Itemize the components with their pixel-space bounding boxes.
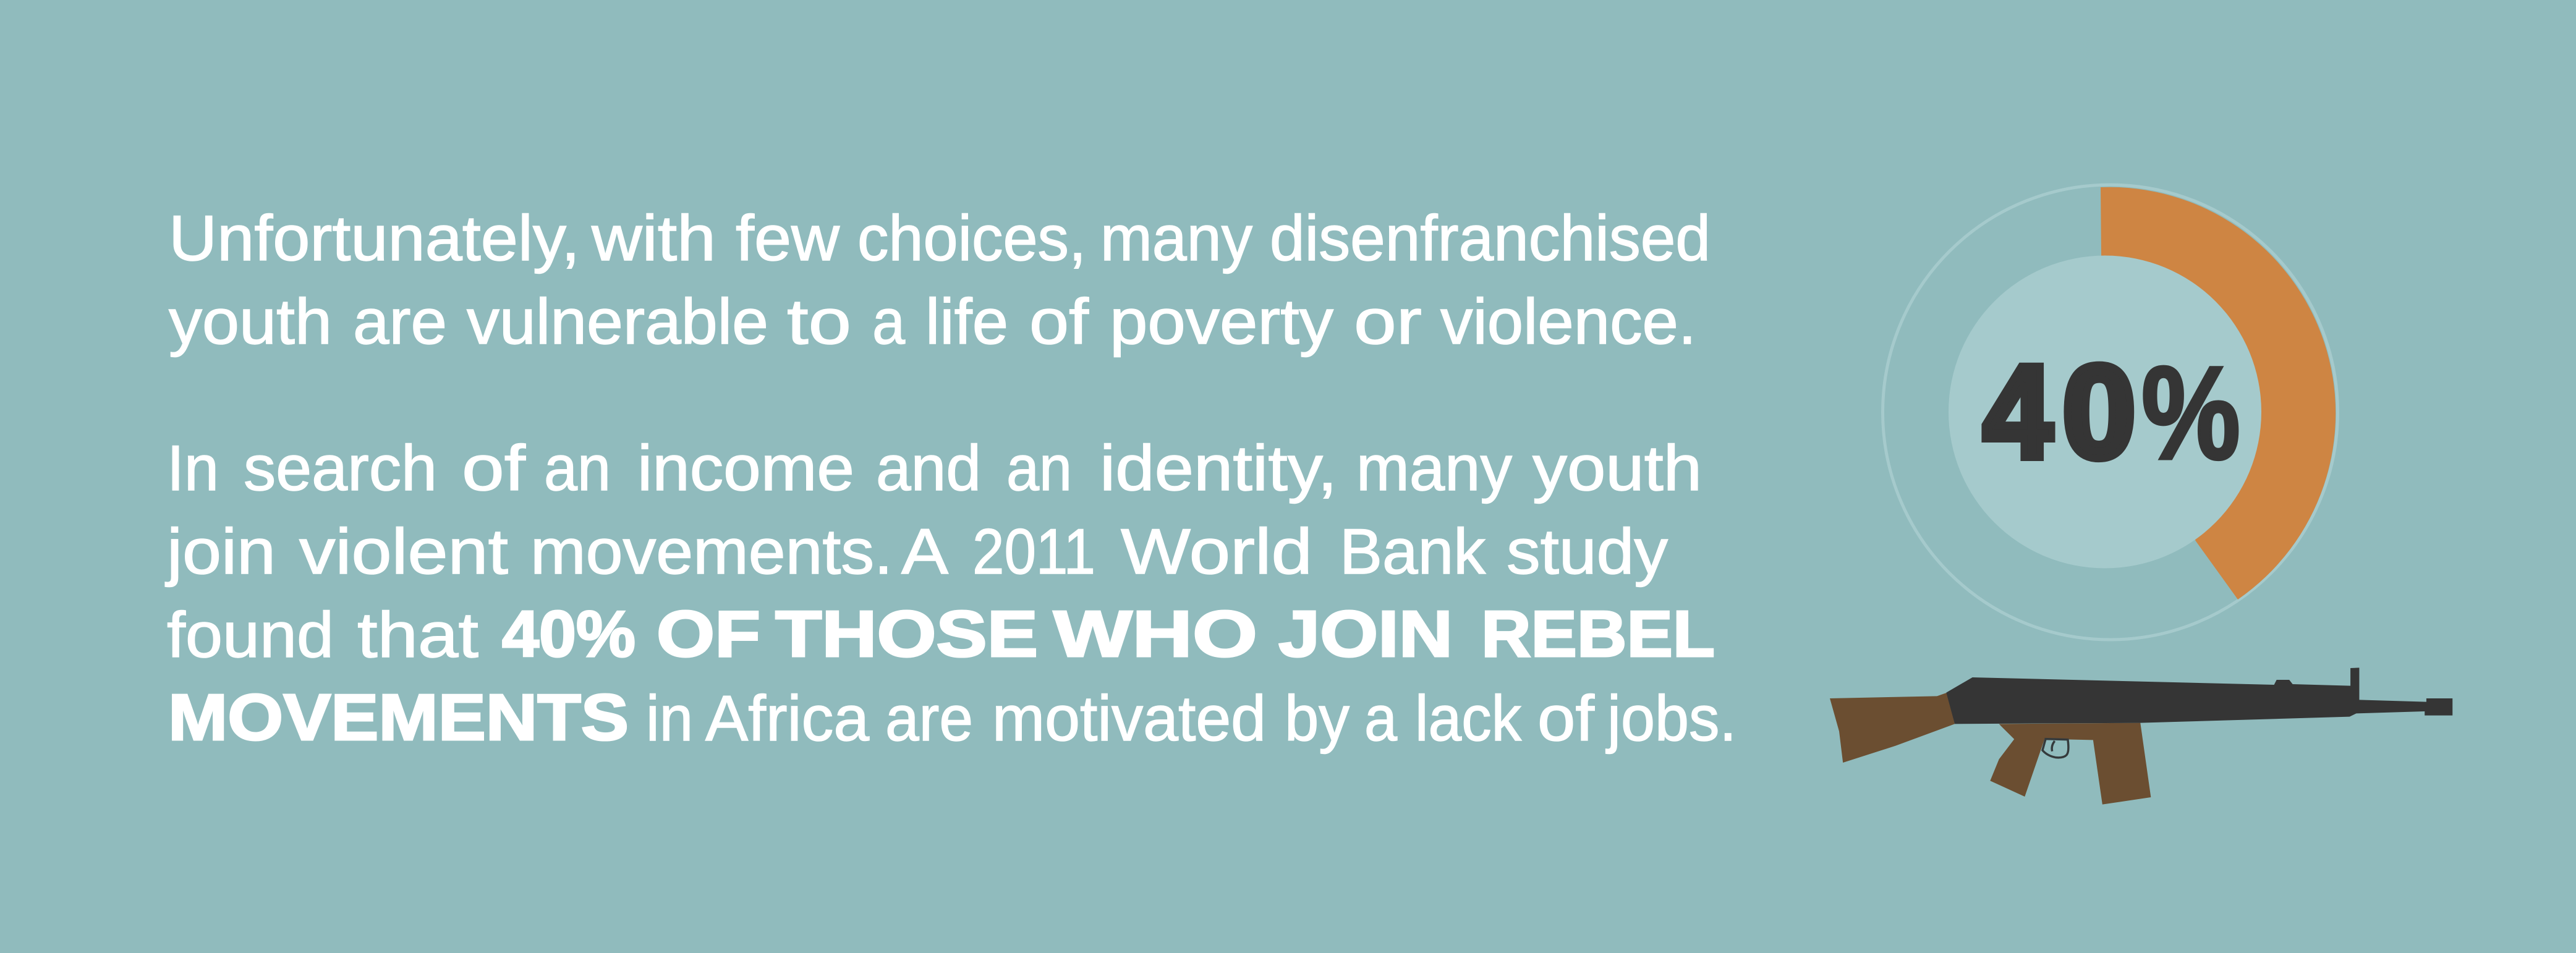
text block: World Bank paragraph <box>165 433 1736 755</box>
text block: World Bank paragraph: search <box>244 433 437 504</box>
text block: World Bank paragraph: Bank <box>1340 516 1486 588</box>
text block: World Bank paragraph: jobs. <box>1605 683 1736 755</box>
text block: opening paragraph: few <box>736 203 840 274</box>
text block: World Bank paragraph: and <box>876 433 981 504</box>
text block: opening paragraph: to <box>787 286 851 358</box>
text block: World Bank paragraph: of <box>462 433 526 504</box>
text block: opening paragraph: of <box>1029 286 1089 358</box>
text block: opening paragraph: are <box>353 286 447 358</box>
text block: World Bank paragraph: youth <box>1532 433 1702 504</box>
highlighted statistic: JOIN <box>1278 598 1453 671</box>
percentage label: 0 <box>2062 338 2136 486</box>
text block: World Bank paragraph: In <box>167 433 219 504</box>
rifle grip and magazine <box>1990 723 2151 805</box>
text block: World Bank paragraph: of <box>1537 683 1595 755</box>
text block: opening paragraph: Unfortunately, <box>169 203 580 274</box>
text block: opening paragraph: vulnerable <box>467 286 768 358</box>
text block: World Bank paragraph: many <box>1356 433 1512 504</box>
outer ring <box>1883 185 2338 640</box>
highlighted statistic: WHO <box>1053 598 1257 671</box>
rifle stock <box>1830 693 1955 763</box>
text block: World Bank paragraph: an <box>1006 433 1072 504</box>
highlighted statistic: OF <box>657 598 760 671</box>
text block: World Bank paragraph: World <box>1121 516 1312 588</box>
text block: World Bank paragraph: motivated <box>992 683 1266 755</box>
text block: opening paragraph: youth <box>169 286 332 358</box>
text block: World Bank paragraph: that <box>357 599 478 671</box>
text block: World Bank paragraph: a <box>1364 683 1397 755</box>
text block: World Bank paragraph: 2011 <box>972 516 1095 588</box>
text block: opening paragraph: life <box>925 286 1008 358</box>
text block: opening paragraph: disenfranchised <box>1270 203 1711 274</box>
orange segment <box>2101 187 2336 599</box>
text block: World Bank paragraph: join <box>165 516 276 588</box>
text block: World Bank paragraph: identity, <box>1100 433 1337 504</box>
text block: opening paragraph: poverty <box>1110 286 1333 358</box>
text block: World Bank paragraph: found <box>167 599 334 671</box>
percentage label: 4 <box>1983 338 2052 486</box>
text block: World Bank paragraph: violent <box>299 516 508 588</box>
highlighted statistic: MOVEMENTS <box>168 681 629 754</box>
text block: World Bank paragraph: an <box>544 433 611 504</box>
text block: opening paragraph: a <box>872 286 905 358</box>
text block: opening paragraph <box>169 203 1711 358</box>
inner circle <box>1949 256 2261 569</box>
text block: World Bank paragraph: A <box>901 516 949 588</box>
text block: World Bank paragraph: income <box>637 433 854 504</box>
highlighted statistic: THOSE <box>775 598 1038 671</box>
text block: World Bank paragraph: study <box>1507 516 1668 588</box>
icon: rifle <box>1830 667 2452 805</box>
percentage label <box>1983 338 2240 487</box>
text block: opening paragraph: many <box>1100 203 1252 274</box>
highlighted statistic: 40% <box>502 598 635 671</box>
text block: opening paragraph: or <box>1354 286 1422 358</box>
trigger guard <box>2043 739 2068 758</box>
rifle barrel and body <box>1946 667 2452 724</box>
highlighted statistic <box>168 598 1715 754</box>
highlighted statistic: REBEL <box>1481 598 1715 671</box>
donut chart: 40% <box>1883 185 2338 640</box>
text block: World Bank paragraph: Africa <box>705 683 869 755</box>
text block: World Bank paragraph: lack <box>1415 683 1522 755</box>
text block: opening paragraph: violence. <box>1440 286 1696 358</box>
text block: World Bank paragraph: movements. <box>530 516 893 588</box>
text block: World Bank paragraph: are <box>885 683 973 755</box>
text block: World Bank paragraph: in <box>646 683 693 755</box>
text block: opening paragraph: with <box>591 203 716 274</box>
text block: World Bank paragraph: by <box>1285 683 1350 755</box>
percentage label: % <box>2141 339 2240 487</box>
text block: opening paragraph: choices, <box>857 203 1086 274</box>
